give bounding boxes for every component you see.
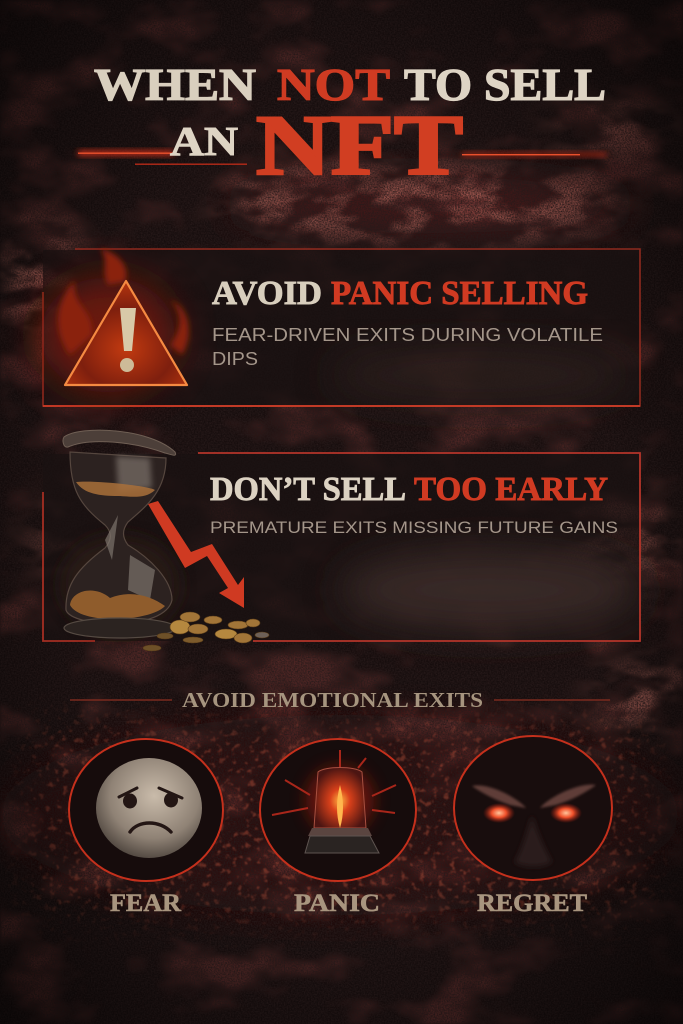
panel heading: TOO EARLY (414, 471, 608, 508)
title line two: NFT (256, 97, 463, 193)
panel description: DIPS (212, 349, 258, 369)
glass highlight (116, 456, 152, 492)
title line two (170, 97, 463, 193)
fear label: FEAR (110, 890, 182, 917)
title line one: WHEN (94, 60, 256, 110)
panic label: PANIC (294, 890, 380, 917)
regret circle (454, 736, 612, 880)
panel description: FEAR-DRIVEN EXITS DURING VOLATILE (212, 325, 603, 345)
title glow lines (78, 150, 607, 165)
sand lower (70, 591, 165, 619)
panel frame (43, 249, 640, 406)
panel: don't sell too early (43, 430, 640, 651)
panel description (212, 325, 603, 369)
icon: alarm siren (272, 750, 396, 853)
icon: glowing eyed face (472, 785, 596, 866)
icon: spilled coins (143, 612, 269, 651)
sand upper (76, 482, 155, 497)
icon: burning warning triangle (40, 248, 189, 393)
hourglass cap (63, 430, 176, 455)
panel heading: DON’T SELL (210, 471, 406, 508)
regret label: REGRET (477, 890, 587, 917)
glass shards (105, 515, 155, 600)
fear circle (69, 739, 223, 881)
panel heading (212, 275, 588, 312)
title line one: TO SELL (404, 60, 606, 110)
exclamation mark (120, 308, 136, 372)
icon: falling red arrow (148, 501, 244, 608)
title line two: AN (170, 118, 238, 164)
panel frame (43, 453, 640, 641)
title line one (94, 60, 606, 110)
emotion: fear (69, 739, 223, 917)
panel heading: PANIC SELLING (331, 275, 588, 312)
section heading: avoid emotional exits: AVOID EMOTIONAL EXITS (182, 688, 483, 712)
panel heading: AVOID (212, 275, 322, 312)
panel heading (210, 471, 608, 508)
panel: avoid panic selling (40, 248, 640, 406)
panic circle (260, 739, 416, 881)
panel description: PREMATURE EXITS MISSING FUTURE GAINS (210, 519, 618, 537)
hourglass base (64, 618, 176, 638)
emotion: panic (260, 739, 416, 917)
icon: sad face (96, 758, 202, 858)
title line one: NOT (277, 60, 390, 110)
title (78, 60, 607, 193)
emotion: regret (454, 736, 612, 917)
icon: cracked hourglass (60, 430, 180, 638)
